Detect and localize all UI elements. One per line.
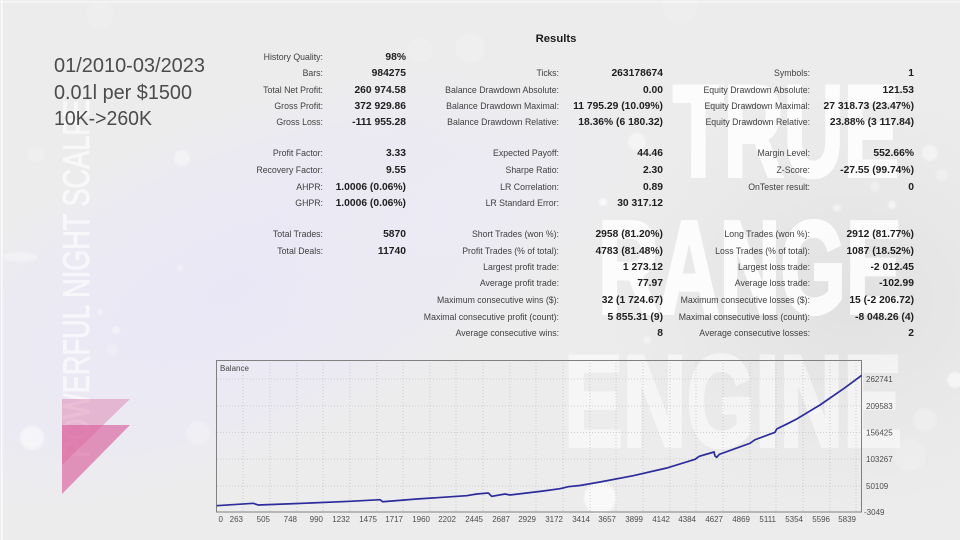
- column 2 labels: Expected Payoff:: [493, 148, 559, 158]
- column 3 values: 0: [908, 182, 914, 193]
- column 3 labels: Z-Score:: [776, 165, 810, 175]
- column 1 values: -111 955.28: [352, 117, 406, 128]
- x axis labels: 5354: [785, 515, 804, 524]
- column 1 values: 98%: [385, 52, 406, 63]
- test settings text block: 01/2010-03/2023: [54, 55, 205, 77]
- column 3 labels: Average consecutive losses:: [699, 328, 810, 338]
- column 3 values: 1: [908, 68, 914, 79]
- big title: TRUE RANGE ENGINE: [564, 58, 902, 474]
- column 1 values: 1.0006 (0.06%): [336, 182, 406, 193]
- x axis labels: 505: [257, 515, 271, 524]
- column 2 values: 18.36% (6 180.32): [578, 117, 663, 128]
- x axis labels: 1717: [385, 515, 404, 524]
- y axis labels: 262741: [866, 375, 893, 384]
- column 3 values: 1087 (18.52%): [846, 246, 914, 257]
- x axis labels: 2687: [492, 515, 511, 524]
- column 3 labels: Average loss trade:: [735, 278, 810, 288]
- panel: results table: [256, 52, 914, 339]
- column 1 labels: Gross Loss:: [276, 117, 323, 127]
- column 1 labels: History Quality:: [264, 52, 323, 62]
- column 2 labels: Ticks:: [536, 68, 559, 78]
- column 3 labels: Equity Drawdown Absolute:: [703, 85, 810, 95]
- column 3 values: [824, 68, 914, 339]
- column 2 values: 0.00: [643, 85, 663, 96]
- column 1 values: 984275: [372, 68, 406, 79]
- column 2 labels: Balance Drawdown Relative:: [447, 117, 559, 127]
- chart frame: [216, 360, 862, 512]
- column 1 values: 372 929.86: [354, 101, 406, 112]
- column 1 values: 11740: [378, 246, 406, 257]
- column 2 values: 4783 (81.48%): [595, 246, 663, 257]
- column 1 labels: Gross Profit:: [274, 101, 323, 111]
- column 1 values: 9.55: [386, 165, 406, 176]
- column 2 values: 8: [657, 328, 663, 339]
- column 2 values: 44.46: [637, 148, 663, 159]
- column 3 labels: Maximal consecutive loss (count):: [679, 312, 810, 322]
- column 1 labels: Total Trades:: [273, 229, 323, 239]
- y axis labels: -3049: [864, 508, 885, 517]
- column 1 labels: Recovery Factor:: [256, 165, 323, 175]
- x axis labels: 1960: [412, 515, 431, 524]
- x axis labels: 5596: [812, 515, 831, 524]
- chart legend: balance: Balance: [220, 364, 249, 373]
- column 3 labels: Margin Level:: [757, 148, 810, 158]
- icon: pink triangles: [62, 399, 130, 494]
- x axis labels: 3414: [572, 515, 591, 524]
- column 2 values: 1 273.12: [623, 262, 663, 273]
- column 1 labels: AHPR:: [296, 182, 323, 192]
- x axis labels: 3657: [598, 515, 617, 524]
- column 3 values: -8 048.26 (4): [855, 312, 914, 323]
- column 2 labels: Balance Drawdown Absolute:: [445, 85, 559, 95]
- x axis labels: 4627: [705, 515, 724, 524]
- column 2 values: [573, 68, 663, 339]
- x axis labels: 4142: [652, 515, 671, 524]
- x axis labels: 4869: [732, 515, 751, 524]
- column 3 values: 2912 (81.77%): [846, 229, 914, 240]
- y axis labels: 209583: [866, 402, 893, 411]
- column 1 labels: [256, 52, 323, 256]
- column 2 labels: Average profit trade:: [480, 278, 559, 288]
- column 3 values: -27.55 (99.74%): [840, 165, 914, 176]
- x axis labels: 2445: [465, 515, 484, 524]
- column 3 labels: OnTester result:: [748, 182, 810, 192]
- test settings text block: 10K->260K: [54, 108, 153, 130]
- column 3 labels: Symbols:: [774, 68, 810, 78]
- column 3 values: 27 318.73 (23.47%): [824, 101, 914, 112]
- balance line chart: [216, 360, 893, 524]
- column 3 labels: Loss Trades (% of total):: [715, 246, 810, 256]
- column 2 values: 11 795.29 (10.09%): [573, 101, 663, 112]
- column 2 labels: Profit Trades (% of total):: [462, 246, 559, 256]
- x axis labels: [219, 515, 857, 524]
- column 2 values: 32 (1 724.67): [602, 295, 663, 306]
- heading: results: Results: [536, 33, 576, 45]
- x axis labels: 0: [219, 515, 224, 524]
- column 1 labels: Bars:: [303, 68, 323, 78]
- column 3 values: 552.66%: [873, 148, 914, 159]
- x axis labels: 1475: [359, 515, 378, 524]
- column 2 labels: [424, 68, 559, 338]
- x axis labels: 263: [230, 515, 244, 524]
- test settings text block: [54, 55, 205, 130]
- column 3 values: -102.99: [879, 278, 914, 289]
- column 2 values: 5 855.31 (9): [607, 312, 663, 323]
- column 1 values: 1.0006 (0.06%): [336, 198, 406, 209]
- column 2 values: 2.30: [643, 165, 663, 176]
- x axis labels: 5111: [759, 515, 777, 524]
- x axis labels: 1232: [332, 515, 351, 524]
- x axis labels: 2929: [518, 515, 537, 524]
- column 3 values: 23.88% (3 117.84): [830, 117, 914, 128]
- column 3 labels: Maximum consecutive losses ($):: [681, 295, 810, 305]
- x axis labels: 4384: [678, 515, 697, 524]
- x axis labels: 748: [284, 515, 298, 524]
- balance curve: [217, 375, 862, 506]
- y axis labels: 50109: [866, 482, 889, 491]
- column 2 labels: LR Standard Error:: [486, 198, 559, 208]
- column 2 labels: Average consecutive wins:: [456, 328, 559, 338]
- column 3 labels: Largest loss trade:: [738, 262, 810, 272]
- column 1 labels: Total Net Profit:: [263, 85, 323, 95]
- column 2 values: 2958 (81.20%): [595, 229, 663, 240]
- column 2 values: 77.97: [637, 278, 663, 289]
- test settings text block: 0.01l per $1500: [54, 82, 192, 104]
- column 1 labels: Profit Factor:: [273, 148, 323, 158]
- column 1 labels: GHPR:: [295, 198, 323, 208]
- column 3 labels: Equity Drawdown Maximal:: [704, 101, 810, 111]
- y axis labels: 156425: [866, 428, 893, 438]
- column 3 values: -2 012.45: [870, 262, 914, 273]
- column 2 values: 263178674: [611, 68, 663, 79]
- column 3 values: 2: [908, 328, 914, 339]
- column 1 values: 5870: [383, 229, 406, 240]
- column 2 labels: Maximal consecutive profit (count):: [424, 312, 559, 322]
- column 3 labels: [679, 68, 810, 338]
- y axis labels: 103267: [866, 455, 893, 464]
- column 3 labels: Equity Drawdown Relative:: [705, 117, 810, 127]
- column 2 labels: Short Trades (won %):: [472, 229, 559, 239]
- column 2 labels: Sharpe Ratio:: [505, 165, 559, 175]
- x axis labels: 3899: [625, 515, 644, 524]
- x axis labels: 990: [310, 515, 324, 524]
- column 2 labels: Largest profit trade:: [483, 262, 559, 272]
- column 1 labels: Total Deals:: [277, 246, 323, 256]
- column 2 labels: Balance Drawdown Maximal:: [446, 101, 559, 111]
- column 1 values: 260 974.58: [354, 85, 406, 96]
- column 3 labels: Long Trades (won %):: [724, 229, 810, 239]
- x axis labels: 5839: [838, 515, 857, 524]
- y axis labels: [864, 375, 893, 517]
- column 1 values: [336, 52, 406, 257]
- x axis labels: 2202: [438, 515, 457, 524]
- column 2 labels: LR Correlation:: [500, 182, 559, 192]
- column 2 values: 30 317.12: [617, 198, 663, 209]
- column 1 values: 3.33: [386, 148, 406, 159]
- column 3 values: 121.53: [882, 85, 914, 96]
- x axis labels: 3172: [545, 515, 564, 524]
- column 3 values: 15 (-2 206.72): [849, 295, 914, 306]
- column 2 labels: Maximum consecutive wins ($):: [437, 295, 559, 305]
- column 2 values: 0.89: [643, 182, 663, 193]
